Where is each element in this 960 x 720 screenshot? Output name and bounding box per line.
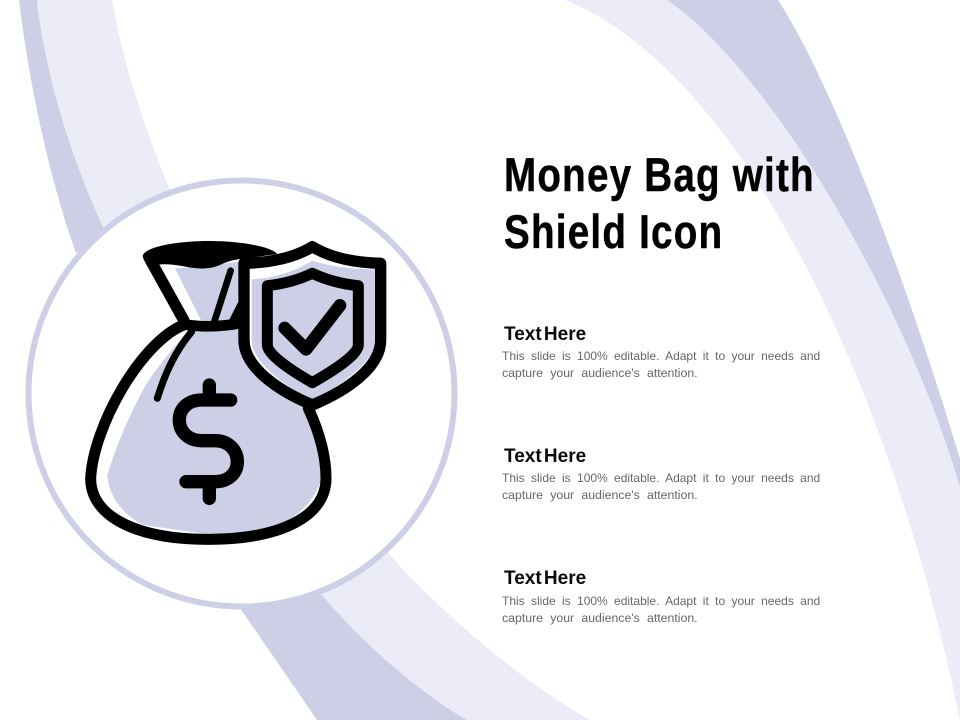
check mark: [285, 305, 340, 349]
bag fill: [107, 327, 322, 535]
title: Money Bag with: [504, 149, 815, 202]
text block 3: [502, 568, 820, 625]
neck fill: [175, 262, 240, 322]
neck left line: [151, 261, 184, 321]
title: [504, 149, 815, 259]
bag crease: [157, 332, 192, 398]
text block 3: This slide is 100% editable. Adapt it to your needs and: [502, 594, 820, 608]
bag opening: [143, 241, 277, 268]
title: Shield Icon: [504, 206, 723, 259]
neck crease: [214, 271, 231, 322]
text block 1: [502, 324, 820, 380]
dollar sign: [179, 385, 237, 498]
circle frame: [28, 180, 454, 606]
text block 2: capture your audience's attention.: [502, 488, 698, 502]
text block 3: Text Here: [504, 568, 586, 589]
text block 1: capture your audience's attention.: [502, 366, 698, 380]
text block 2: This slide is 100% editable. Adapt it to your needs and: [502, 471, 820, 485]
neck right shadow: [228, 302, 243, 330]
text block 1: This slide is 100% editable. Adapt it to your needs and: [502, 349, 820, 363]
text block 2: [502, 446, 820, 502]
text block 1: Text Here: [504, 324, 586, 345]
text block 2: Text Here: [504, 446, 586, 467]
shield: [244, 247, 381, 405]
bag outline: [91, 325, 326, 539]
text block 3: capture your audience's attention.: [502, 611, 698, 625]
icon: money bag with shield: [91, 241, 381, 539]
bag tie: [182, 323, 243, 326]
